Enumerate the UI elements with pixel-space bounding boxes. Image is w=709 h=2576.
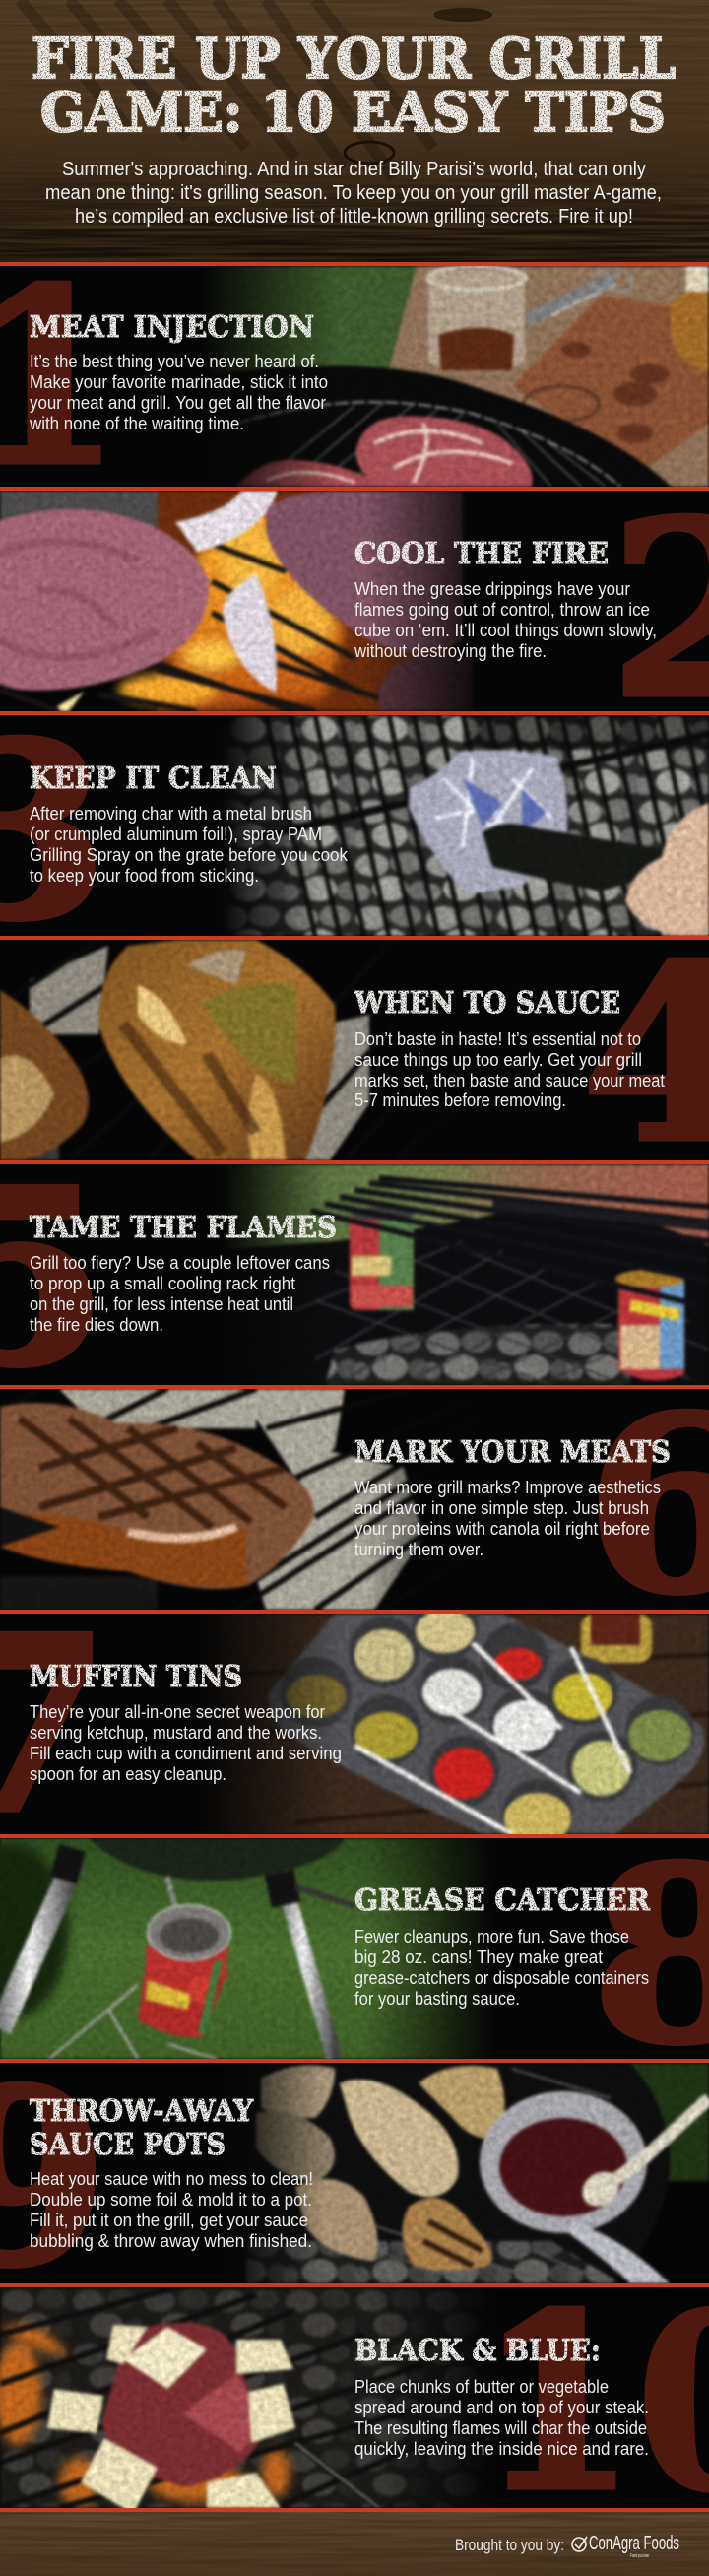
body text: Don’t baste in haste! It’s essential not to — [354, 1028, 641, 1049]
body text: bubbling & throw away when finished. — [30, 2230, 312, 2251]
photo: injector and steak on grill — [0, 266, 709, 487]
body text: Fill each cup with a condiment and serving — [30, 1743, 342, 1763]
body text — [30, 2168, 313, 2251]
body text: on the grill, for less intense heat until — [30, 1293, 293, 1314]
body text — [29, 351, 328, 433]
photo: burgers over flames — [0, 491, 473, 711]
body text: with none of the waiting time. — [29, 413, 244, 433]
body text: Make your favorite marinade, stick it into — [30, 371, 328, 392]
photo: steak with grill marks — [0, 1389, 492, 1610]
heading: SAUCE POTS — [30, 2128, 226, 2162]
intro text: mean one thing: it's grilling season. To keep you on your grill master A-game, — [45, 182, 662, 204]
heading — [30, 2094, 254, 2162]
panel: tip 5 tame the flames — [0, 1136, 709, 1420]
body text: grease-catchers or disposable containers — [354, 1967, 649, 1988]
body text: sauce things up too early. Get your grill — [354, 1049, 642, 1070]
panel: tip 8 grease catcher — [0, 1814, 709, 2097]
body text: The resulting flames will char the outside — [354, 2417, 647, 2438]
body text: big 28 oz. cans! They make great — [354, 1947, 603, 1967]
body text: the fire dies down. — [30, 1314, 163, 1335]
body text: Double up some foil & mold it to a pot. — [30, 2189, 312, 2210]
heading: THROW-AWAY — [30, 2094, 254, 2129]
heading: KEEP IT CLEAN — [30, 761, 277, 796]
photo: basted chicken — [0, 940, 473, 1160]
body text: turning them over. — [354, 1539, 483, 1559]
title: GAME: 10 EASY TIPS — [40, 80, 666, 144]
body text: your meat and grill. You get all the flavor — [30, 392, 326, 413]
body text: marks set, then baste and sauce your meat — [354, 1070, 665, 1090]
sponsor credit: Brought to you by: — [455, 2536, 564, 2554]
heading: TAME THE FLAMES — [30, 1211, 337, 1245]
panel: tip 6 mark your meats — [0, 1363, 709, 1647]
body text: After removing char with a metal brush — [30, 803, 312, 824]
body text: to keep your food from sticking. — [30, 865, 259, 886]
title: FIRE UP YOUR GRILL — [32, 27, 676, 92]
body text: your proteins with canola oil right before — [354, 1518, 650, 1539]
intro text — [45, 159, 662, 228]
body text — [30, 1701, 342, 1784]
photo: foil ball on coals — [197, 715, 709, 936]
body text — [30, 1252, 330, 1335]
wood background — [0, 0, 709, 262]
body text: Fewer cleanups, more fun. Save those — [354, 1926, 629, 1947]
panel: tip 9 throw-away sauce pots — [0, 2036, 709, 2320]
panel: tip 2 cool the fire — [0, 468, 709, 752]
body text: for your basting sauce. — [354, 1988, 520, 2009]
heading: GREASE CATCHER — [354, 1883, 651, 1918]
panel: tip 4 when to sauce — [0, 912, 709, 1196]
body text: quickly, leaving the inside nice and rare. — [354, 2438, 649, 2459]
body text — [354, 1477, 661, 1559]
logo: ConAgra Foods: Food you love — [630, 2553, 649, 2559]
body text — [30, 803, 349, 886]
body text: 5-7 minutes before removing. — [354, 1090, 566, 1110]
intro text: Summer's approaching. And in star chef Billy Parisi’s world, that can only — [62, 159, 646, 180]
body text: flames going out of control, throw an ice — [354, 599, 650, 620]
body text: They’re your all-in-one secret weapon for — [30, 1701, 325, 1722]
photo: steak with butter — [0, 2287, 512, 2514]
body text: cube on ‘em. It’ll cool things down slowly, — [354, 620, 657, 640]
panel: tip 1 meat injection — [0, 235, 709, 519]
body text: spread around and on top of your steak. — [354, 2397, 649, 2417]
body text: Want more grill marks? Improve aesthetics — [354, 1477, 661, 1497]
panel: tip 7 muffin tins — [0, 1583, 709, 1867]
heading: COOL THE FIRE — [354, 537, 609, 571]
body text: spoon for an easy cleanup. — [30, 1763, 226, 1784]
body text: (or crumpled aluminum foil!), spray PAM — [30, 824, 322, 844]
body text: serving ketchup, mustard and the works. — [30, 1722, 322, 1743]
heading: WHEN TO SAUCE — [354, 986, 620, 1021]
logo: ConAgra Foods — [572, 2533, 679, 2559]
panel: footer — [0, 2512, 709, 2576]
header panel — [0, 0, 709, 262]
panel: tip 10 black and blue — [0, 2261, 709, 2544]
wood background — [0, 2512, 709, 2576]
heading: MARK YOUR MEATS — [354, 1435, 671, 1470]
body text: Fill it, put it on the grill, get your sauce — [30, 2210, 308, 2230]
intro text: he’s compiled an exclusive list of little-known grilling secrets. Fire it up! — [75, 206, 633, 228]
body text: When the grease drippings have your — [354, 578, 630, 599]
photo: can hanging from grill — [0, 1838, 512, 2059]
title — [32, 27, 676, 144]
body text — [354, 2376, 649, 2459]
body text: Heat your sauce with no mess to clean! — [30, 2168, 313, 2189]
photo: rack on cans — [197, 1164, 709, 1385]
photo: muffin tin condiments — [167, 1594, 709, 1850]
body text — [354, 578, 657, 661]
body text: without destroying the fire. — [354, 640, 547, 661]
body text — [354, 1028, 665, 1110]
heading: MUFFIN TINS — [30, 1660, 242, 1694]
panel: tip 3 keep it clean — [0, 690, 709, 973]
body text — [354, 1926, 649, 2009]
body text: Grilling Spray on the grate before you cook — [30, 844, 349, 865]
body text: Grill too fiery? Use a couple leftover cans — [30, 1252, 330, 1273]
body text: Place chunks of butter or vegetable — [354, 2376, 609, 2397]
body text: It’s the best thing you’ve never heard of. — [30, 351, 319, 371]
body text: and flavor in one simple step. Just brush — [354, 1497, 649, 1518]
photo: chicken and foil pot — [197, 2063, 709, 2283]
heading: MEAT INJECTION — [30, 310, 314, 345]
body text: to prop up a small cooling rack right — [30, 1273, 295, 1293]
heading: BLACK & BLUE: — [354, 2334, 601, 2368]
